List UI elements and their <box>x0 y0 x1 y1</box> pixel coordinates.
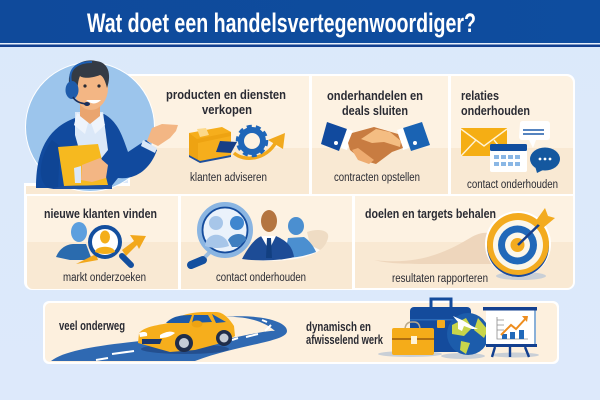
title: Wat doet een handelsvertegenwoordiger? <box>87 8 476 38</box>
icon: briefcases <box>378 299 471 357</box>
panel: middle row <box>24 183 575 290</box>
heading: relaties onderhouden <box>461 88 530 118</box>
panel: bottom row <box>43 301 559 364</box>
heading: onderhandelen en deals sluiten: deals sluiten <box>342 103 408 118</box>
heading: producten en diensten verkopen: producten en diensten <box>166 87 286 102</box>
label: contact onderhouden: contact onderhouden <box>467 179 558 191</box>
card: contact onderhouden <box>191 204 328 284</box>
label: resultaten rapporteren: resultaten rapporteren <box>392 273 488 285</box>
icon: box, gear and arrow <box>189 126 285 163</box>
card: relaties onderhouden <box>461 88 560 191</box>
heading: relaties onderhouden: relaties <box>461 88 499 103</box>
card: onderhandelen en deals sluiten <box>321 88 430 184</box>
card: doelen en targets behalen <box>365 206 555 285</box>
icon: road <box>51 316 287 361</box>
icon: globe with airplane <box>441 313 489 359</box>
icon: magnifier with business people <box>191 204 328 265</box>
card: nieuwe klanten vinden <box>44 206 157 284</box>
icon: target with arrow <box>374 208 555 280</box>
label: klanten adviseren: klanten adviseren <box>190 172 267 184</box>
heading: doelen en targets behalen: doelen en targets behalen <box>365 206 496 221</box>
label: contact onderhouden: contact onderhouden <box>216 272 306 284</box>
heading: onderhandelen en deals sluiten <box>327 88 423 118</box>
icon: presentation board with chart <box>483 307 539 358</box>
icon: envelope, calendar and chat bubbles <box>461 121 560 173</box>
card: veel onderweg <box>51 299 539 361</box>
panel: top row <box>128 74 575 194</box>
heading: producten en diensten verkopen: verkopen <box>202 102 252 117</box>
heading: onderhandelen en deals sluiten: onderhandelen en <box>327 88 423 103</box>
heading: nieuwe klanten vinden: nieuwe klanten vinden <box>44 206 157 221</box>
label: dynamisch en afwisselend werk <box>306 319 384 347</box>
heading: relaties onderhouden: onderhouden <box>461 103 530 118</box>
icon: yellow car <box>138 312 235 354</box>
heading: producten en diensten verkopen <box>166 87 286 117</box>
icon: magnifier with person and arrow <box>56 222 146 265</box>
label: markt onderzoeken: markt onderzoeken <box>63 272 146 284</box>
label: veel onderweg: veel onderweg <box>59 318 125 333</box>
card: producten en diensten verkopen <box>166 87 286 184</box>
icon: handshake <box>321 122 430 164</box>
header banner <box>0 0 600 47</box>
label: dynamisch en afwisselend werk: afwisselend werk <box>306 332 384 347</box>
label: dynamisch en afwisselend werk: dynamisch en <box>306 319 371 334</box>
label: contracten opstellen: contracten opstellen <box>334 172 420 184</box>
person with headset <box>25 60 178 192</box>
